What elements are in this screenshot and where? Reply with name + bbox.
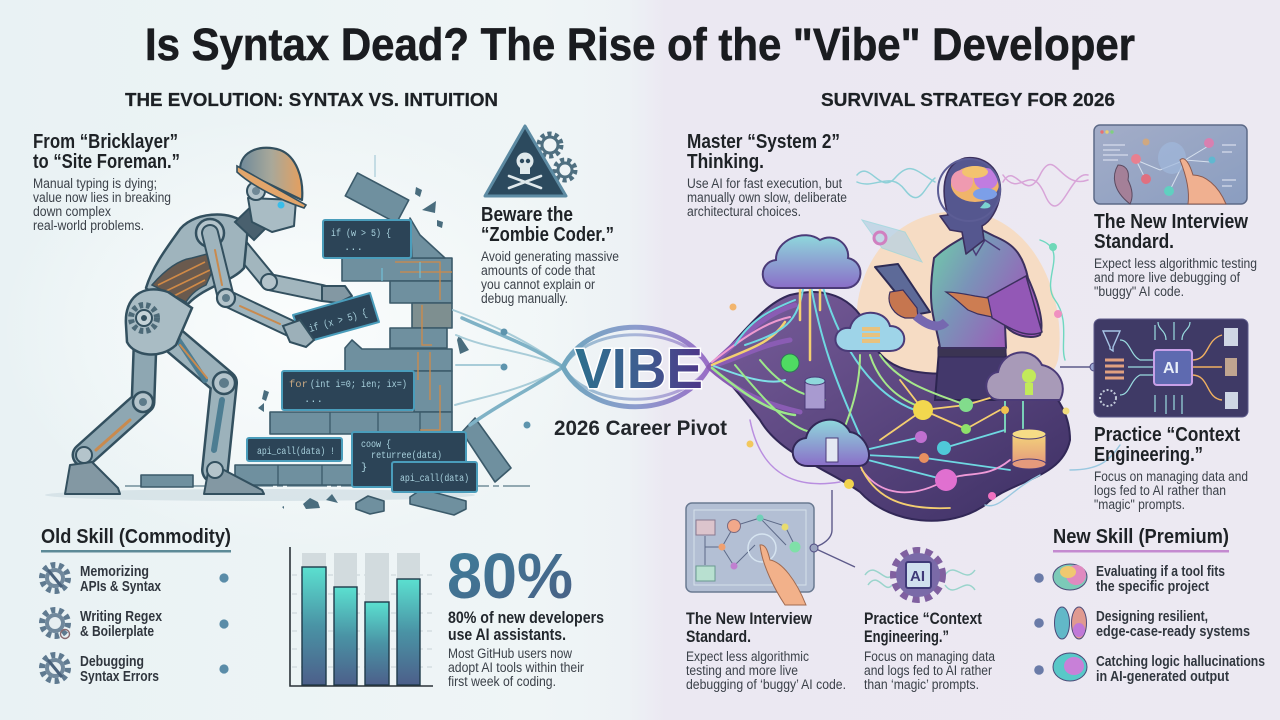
text block: zombie coder: you cannot explain or xyxy=(481,277,595,292)
text block: context engineering right: "magic" prompts. xyxy=(1094,497,1185,512)
database right xyxy=(1012,429,1046,469)
vibe wordmark: VIBE xyxy=(575,337,703,401)
code block: api_call right: api_call(data) xyxy=(400,473,469,485)
floating screen xyxy=(862,220,922,262)
heading: left section: THE EVOLUTION: SYNTAX VS. INTUITION xyxy=(125,89,498,110)
list item: regex xyxy=(42,609,229,640)
text block: bricklayer to foreman: down complex xyxy=(33,204,111,219)
illustration: vibe helix ribbons xyxy=(453,305,800,428)
cloud top xyxy=(763,235,860,288)
forearm xyxy=(986,276,1042,334)
code block: for loop: for xyxy=(289,379,308,391)
text block: context engineering right xyxy=(1094,424,1248,512)
head and helmet xyxy=(235,148,306,240)
text block: zombie coder: amounts of code that xyxy=(481,263,595,278)
code block: api_call left: api_call(data) ! xyxy=(257,446,335,458)
list item: evaluating xyxy=(1034,564,1225,595)
text block: context engineering bottom: Practice “Context xyxy=(864,609,982,628)
far leg xyxy=(65,318,153,494)
panel: interview screen xyxy=(1094,125,1247,204)
list item: regex: & Boilerplate xyxy=(80,624,154,640)
panel: new skill list: New Skill (Premium) xyxy=(1053,526,1229,548)
title: Is Syntax Dead? The Rise of the "Vibe" Developer xyxy=(145,19,1135,70)
text block: context engineering right: Engineering.” xyxy=(1094,444,1203,466)
panel: old skill list: Old Skill (Commodity) xyxy=(41,526,231,548)
list item: catching: in AI-generated output xyxy=(1096,669,1229,685)
text block: interview standard bottom: testing and more live xyxy=(686,663,798,678)
text block: context engineering bottom: than ‘magic’ prompts. xyxy=(864,677,979,692)
code block: for loop xyxy=(282,371,414,410)
code block: for loop: (int i=0; ien; ix=) xyxy=(310,379,407,391)
stat: 80 percent: first week of coding. xyxy=(448,674,556,689)
text block: context engineering right: Focus on managing data and xyxy=(1094,469,1248,484)
list item: debugging: Syntax Errors xyxy=(80,669,159,685)
connector: network to AI panel xyxy=(1060,363,1098,371)
list item: debugging: Debugging xyxy=(80,654,144,670)
code block: return xyxy=(352,432,466,487)
code block: return: coow { xyxy=(361,439,391,451)
list item: evaluating: the specific project xyxy=(1096,579,1209,595)
text block: system 2: Use AI for fast execution, but xyxy=(687,176,842,191)
held code block: if (x > 5) { xyxy=(308,308,369,336)
panel: context engineering chip: AI xyxy=(1163,360,1179,377)
icon: zombie warning xyxy=(485,126,575,196)
stat: 80 percent xyxy=(447,540,604,689)
code block: return: returree(data) xyxy=(371,450,442,462)
text block: system 2: Thinking. xyxy=(687,151,764,173)
panel: old skill list xyxy=(41,526,231,685)
code block: return: } xyxy=(361,462,367,474)
near arm xyxy=(210,233,294,330)
text block: context engineering right: Practice “Context xyxy=(1094,424,1240,446)
list item: regex: Writing Regex xyxy=(80,609,162,625)
text block: context engineering bottom xyxy=(864,609,995,692)
neck and head xyxy=(940,158,1000,254)
list item: designing: Designing resilient, xyxy=(1096,609,1208,625)
icon: AI gear: AI xyxy=(910,568,925,585)
stat: 80 percent: use AI assistants. xyxy=(448,625,566,644)
text block: interview standard bottom: debugging of ‘buggy’ AI code. xyxy=(686,677,846,692)
code block: api_call left xyxy=(247,438,342,461)
text block: interview standard bottom: Expect less algorithmic xyxy=(686,649,809,664)
text block: zombie coder xyxy=(481,204,619,306)
list item: memorizing: Memorizing xyxy=(80,564,149,580)
text block: zombie coder: Beware the xyxy=(481,204,573,226)
text block: context engineering bottom: and logs fed to AI rather xyxy=(864,663,992,678)
far arm xyxy=(237,243,352,303)
heading: right section: SURVIVAL STRATEGY FOR 2026 xyxy=(821,89,1115,110)
cloud small xyxy=(835,313,904,351)
text block: interview standard right: "buggy" AI code. xyxy=(1094,284,1184,299)
torso xyxy=(126,215,248,355)
text block: interview standard right xyxy=(1094,211,1257,299)
code block: api_call right xyxy=(392,462,477,492)
near leg xyxy=(150,320,264,494)
text block: interview standard right: The New Interview xyxy=(1094,211,1248,233)
illustration: brick wall with code blocks xyxy=(45,155,530,515)
text block: bricklayer to foreman: Manual typing is dying; xyxy=(33,176,157,191)
illustration: purple network blob xyxy=(709,292,1070,521)
cloud right with bulb xyxy=(986,352,1063,400)
database left xyxy=(805,377,825,409)
text block: system 2: manually own slow, deliberate xyxy=(687,190,847,205)
illustration: person with brain and tablet xyxy=(857,158,1088,400)
text block: bricklayer to foreman: to “Site Foreman.” xyxy=(33,151,180,173)
list item: debugging xyxy=(42,654,229,685)
text block: zombie coder: “Zombie Coder.” xyxy=(481,224,614,246)
panel: new skill list xyxy=(1034,526,1265,685)
text block: bricklayer to foreman: From “Bricklayer” xyxy=(33,131,178,153)
stat: 80 percent: 80% of new developers xyxy=(448,608,604,627)
list item: designing xyxy=(1034,607,1250,640)
list item: designing: edge-case-ready systems xyxy=(1096,624,1250,640)
panel: debugging tablet with connector xyxy=(686,490,855,605)
text block: interview standard right: and more live debugging of xyxy=(1094,270,1240,285)
text: 2026 career pivot: 2026 Career Pivot xyxy=(554,417,727,440)
list item: evaluating: Evaluating if a tool fits xyxy=(1096,564,1225,580)
code block: for loop: ... xyxy=(304,394,323,406)
illustration: cloud network xyxy=(730,235,1120,508)
code block: if w: ... xyxy=(344,242,363,254)
shirt xyxy=(931,228,1042,348)
list item: memorizing xyxy=(42,564,229,595)
text block: interview standard bottom: The New Interview xyxy=(686,609,813,628)
panel: context engineering chip xyxy=(1094,319,1248,417)
text block: zombie coder: debug manually. xyxy=(481,291,568,306)
text block: context engineering bottom: Engineering.” xyxy=(864,627,949,646)
text block: system 2 xyxy=(687,131,847,219)
stat: 80 percent: adopt AI tools within their xyxy=(448,660,584,675)
brain xyxy=(938,159,1000,221)
code block: if w: if (w > 5) { xyxy=(331,228,391,240)
stat: 80 percent: 80% xyxy=(447,540,573,612)
held code block xyxy=(293,293,379,343)
cloud bottom xyxy=(793,420,869,466)
text block: interview standard right: Expect less algorithmic testing xyxy=(1094,256,1257,271)
text block: bricklayer to foreman: real-world problems. xyxy=(33,218,144,233)
text block: context engineering right: logs fed to AI rather than xyxy=(1094,483,1226,498)
text block: system 2: architectural choices. xyxy=(687,204,801,219)
text block: interview standard bottom: Standard. xyxy=(686,627,751,646)
hand on tablet xyxy=(889,290,918,318)
illustration: robot builder xyxy=(65,148,379,494)
tablet xyxy=(875,264,930,315)
text block: interview standard right: Standard. xyxy=(1094,231,1174,253)
code block: if w xyxy=(323,220,411,258)
text block: bricklayer to foreman: value now lies in breaking xyxy=(33,190,171,205)
legs xyxy=(935,347,1010,400)
text block: interview standard bottom xyxy=(686,609,846,692)
illustration: orange halo behind person xyxy=(857,211,1060,397)
bar chart xyxy=(290,547,433,686)
icon: AI gear xyxy=(865,551,975,599)
text block: zombie coder: Avoid generating massive xyxy=(481,249,619,264)
text block: system 2: Master “System 2” xyxy=(687,131,840,153)
pointing hand xyxy=(946,292,992,317)
text block: context engineering bottom: Focus on managing data xyxy=(864,649,995,664)
list item: memorizing: APIs & Syntax xyxy=(80,579,161,595)
list item: catching xyxy=(1034,653,1265,685)
robot hand xyxy=(283,320,314,347)
stat: 80 percent: Most GitHub users now xyxy=(448,646,572,661)
text block: bricklayer to foreman xyxy=(33,131,180,233)
